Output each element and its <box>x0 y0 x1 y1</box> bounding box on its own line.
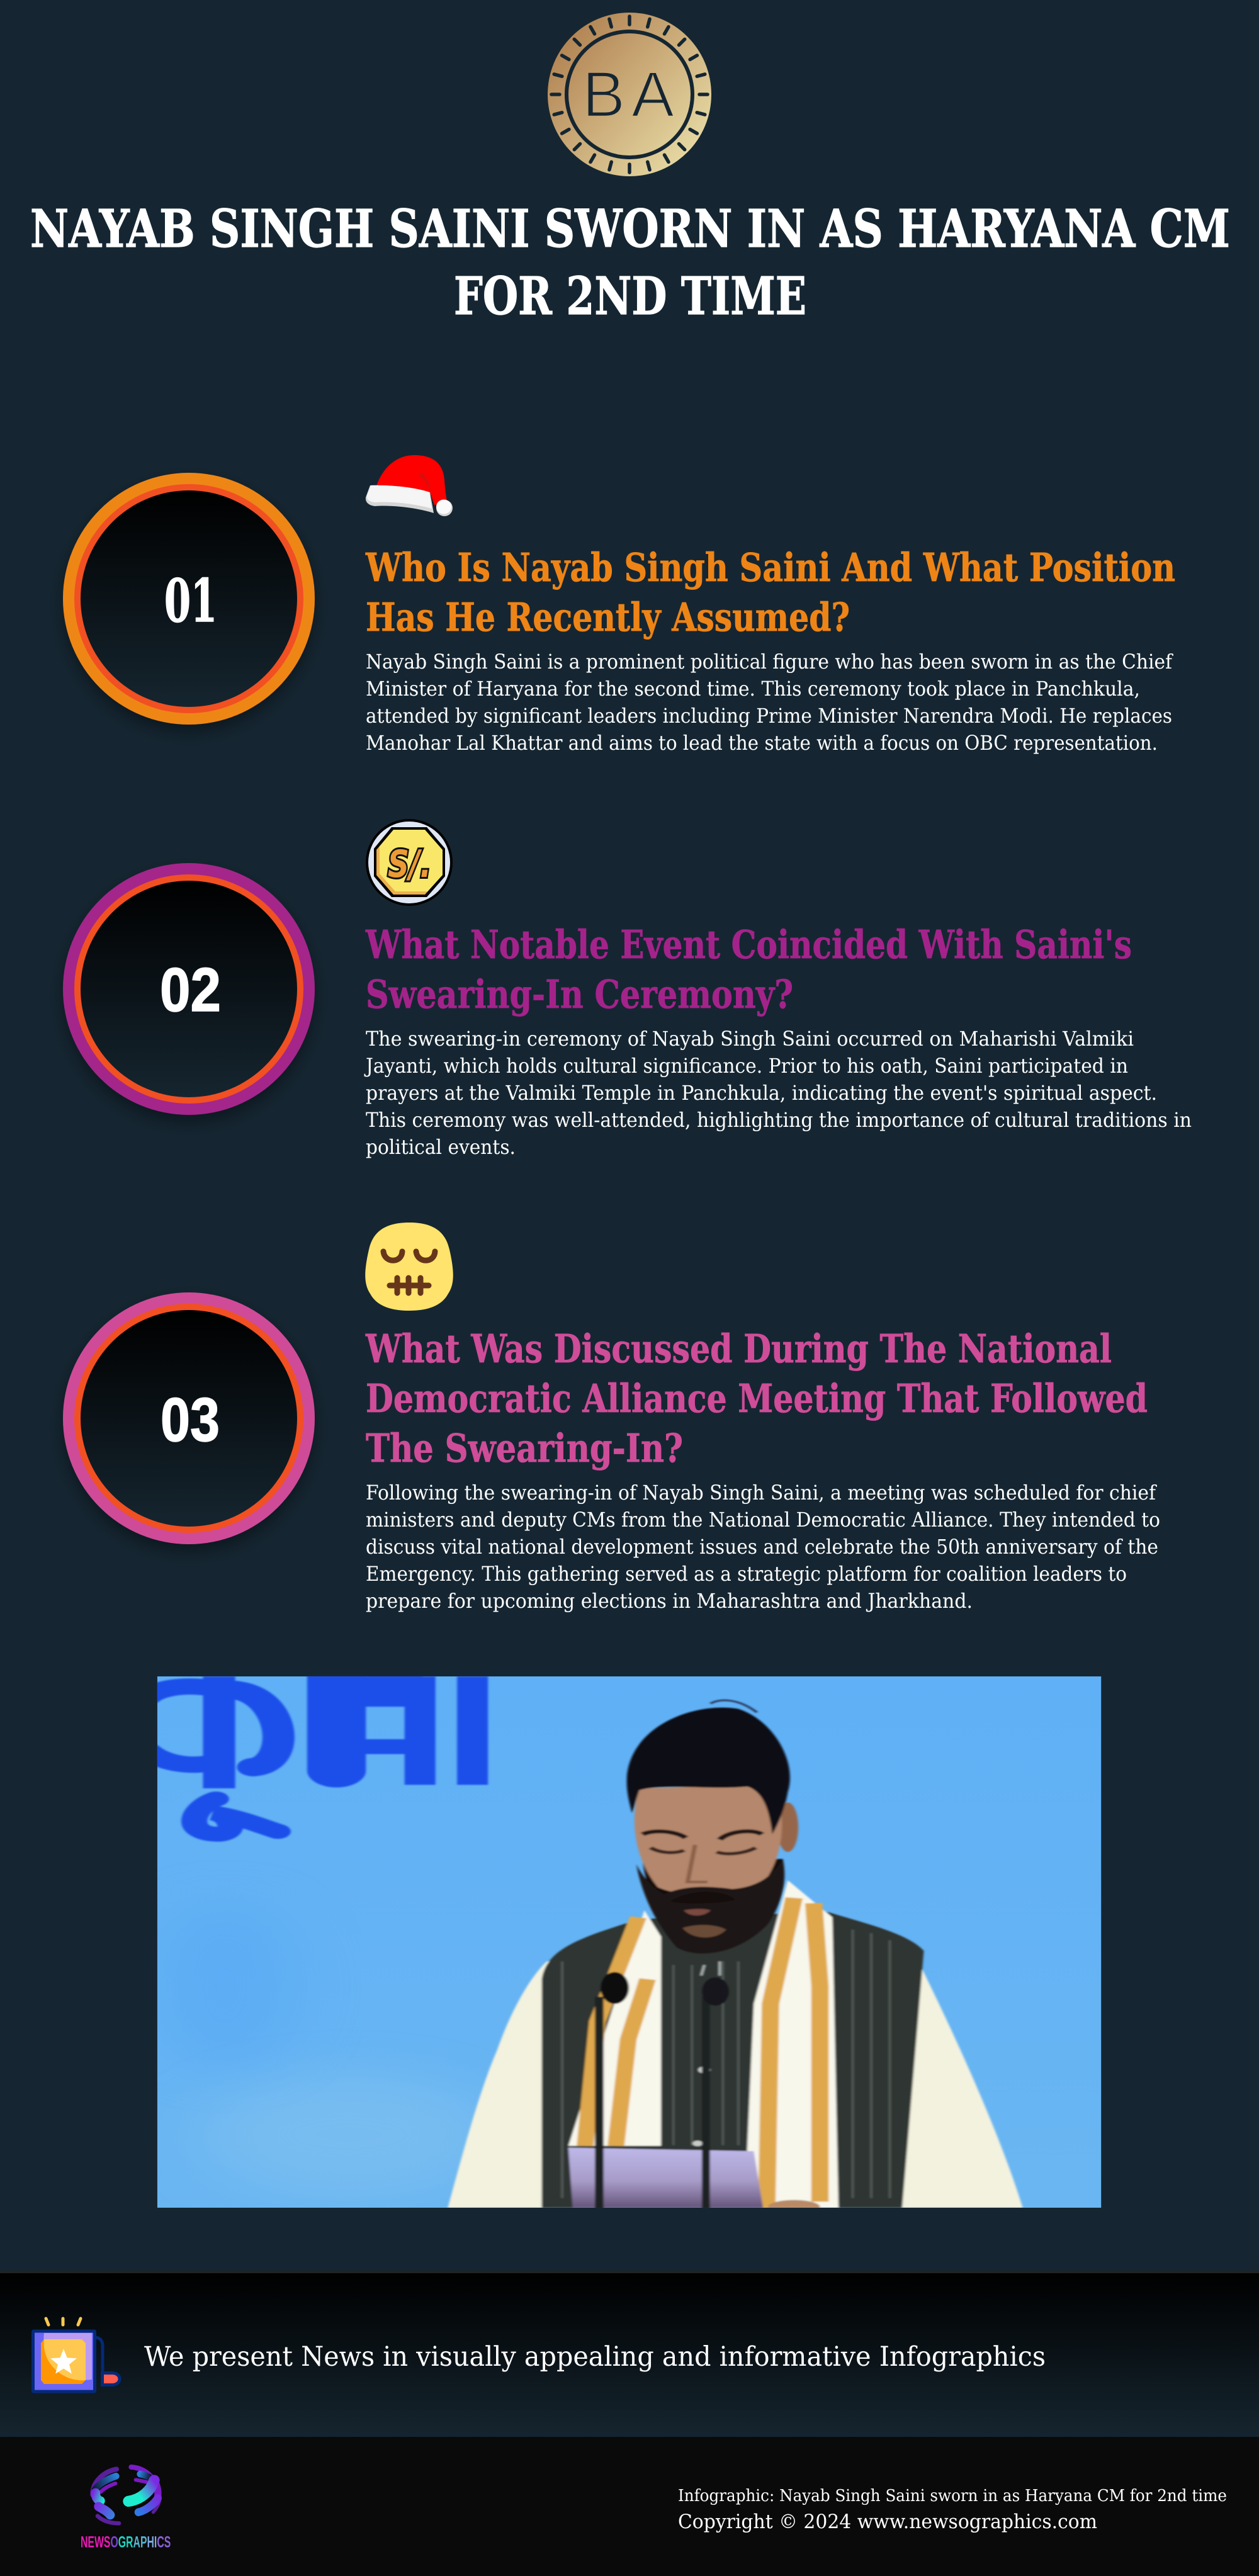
body text 3: ministers and deputy CMs from the National Democratic Alliance. They intended to <box>366 1509 1160 1532</box>
heading 1: Has He Recently Assumed? <box>366 594 850 640</box>
heading 3 <box>365 1326 1148 1471</box>
photo: Nayab Singh Saini at the microphones <box>148 1676 1101 2214</box>
body text 1: Manohar Lal Khattar and aims to lead the state with a focus on OBC representation. <box>366 732 1158 755</box>
icon: santa hat <box>366 455 453 516</box>
body text 2: This ceremony was well-attended, highlighting the importance of cultural traditions in <box>366 1109 1192 1132</box>
body text 3 <box>366 1482 1160 1613</box>
body text 2 <box>364 1028 1192 1159</box>
heading 2 <box>365 922 1132 1017</box>
body text 3: Following the swearing-in of Nayab Singh Saini, a meeting was scheduled for chief <box>366 1482 1157 1505</box>
body text 3: prepare for upcoming elections in Maharashtra and Jharkhand. <box>366 1590 973 1613</box>
body text 3: discuss vital national development issues and celebrate the 50th anniversary of the <box>366 1536 1158 1559</box>
number badge 01: 01 <box>164 567 217 636</box>
body text 1: Minister of Haryana for the second time. This ceremony took place in Panchkula, <box>366 678 1140 701</box>
body text 1 <box>366 651 1173 755</box>
icon: BA gold coin logo: BA <box>582 59 674 130</box>
brand name: NEWSOGRAPHICS <box>81 2534 171 2551</box>
divider bar <box>0 2271 1259 2273</box>
heading 2: Swearing-In Ceremony? <box>366 971 793 1017</box>
title <box>30 199 1230 327</box>
icon: newsographics globe logo <box>81 2467 171 2551</box>
number badge 03 <box>63 1292 315 1544</box>
footer credit text: Infographic: Nayab Singh Saini sworn in as Haryana CM for 2nd time <box>678 2487 1227 2505</box>
panel: question 2 <box>63 820 1192 1159</box>
body text 2: political events. <box>366 1136 516 1159</box>
title: FOR 2ND TIME <box>454 266 806 327</box>
tagline band <box>0 2273 1259 2437</box>
body text 2: prayers at the Valmiki Temple in Panchkula, indicating the event's spiritual aspect. <box>366 1082 1157 1105</box>
number badge 02: 02 <box>160 955 221 1024</box>
panel: question 1 <box>63 455 1175 755</box>
icon: sol coin: S/. <box>388 842 431 886</box>
footer <box>0 2437 1259 2576</box>
body text 2: The swearing-in ceremony of Nayab Singh Saini occurred on Maharishi Valmiki <box>366 1028 1134 1051</box>
body text 2: Jayanti, which holds cultural significance. Prior to his oath, Saini participated in <box>364 1055 1128 1078</box>
icon: zipped mouth emoji <box>365 1223 453 1311</box>
icon: star mug <box>33 2319 120 2392</box>
footer credit text <box>678 2487 1227 2533</box>
number badge 01 <box>63 473 315 725</box>
body text 3: Emergency. This gathering served as a strategic platform for coalition leaders to <box>366 1563 1127 1586</box>
number badge 03: 03 <box>161 1385 220 1454</box>
heading 3: What Was Discussed During The National <box>365 1326 1112 1372</box>
footer credit text: Copyright © 2024 www.newsographics.com <box>678 2511 1097 2533</box>
body text 1: attended by significant leaders including Prime Minister Narendra Modi. He replaces <box>366 705 1172 728</box>
heading 3: The Swearing-In? <box>366 1425 683 1471</box>
heading 1 <box>365 545 1175 640</box>
tagline text: We present News in visually appealing and informative Infographics <box>144 2341 1046 2373</box>
body text 1: Nayab Singh Saini is a prominent political figure who has been sworn in as the Chief <box>366 651 1173 674</box>
icon: sol coin <box>367 820 451 905</box>
panel: question 3 <box>63 1223 1160 1613</box>
number badge 02 <box>63 863 315 1115</box>
icon: BA gold coin logo <box>548 13 711 176</box>
